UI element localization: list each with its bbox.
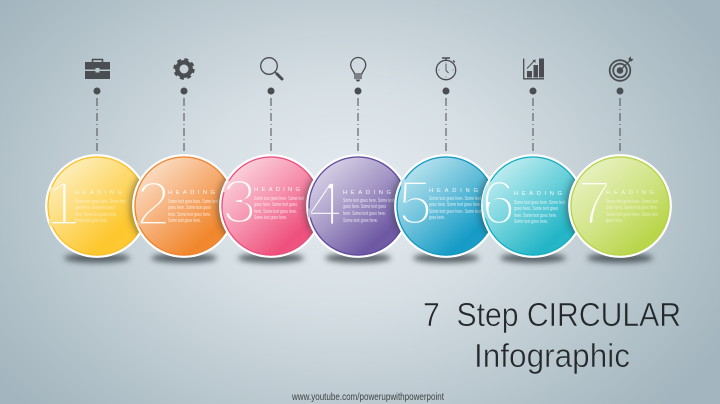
connector 5 — [442, 88, 450, 155]
connector 2 — [180, 88, 188, 155]
step 4 text: Some text goes here. Some text — [343, 198, 394, 204]
number 5: 5 — [398, 169, 432, 238]
website url: www.youtube.com/powerupwithpowerpoint — [291, 392, 444, 403]
floor shadows — [64, 253, 653, 263]
step 5 text: Some text goes here. Some text — [429, 196, 481, 202]
step 6 circle — [478, 154, 584, 258]
step 3 text: Some text goes here. — [254, 215, 287, 221]
step 2 text — [168, 190, 218, 224]
connector 4 — [354, 88, 362, 155]
step 3 text: goes here. Some text goes — [254, 202, 297, 208]
step 6 text: Some text goes here. Some text — [514, 200, 565, 206]
step 1 circle — [46, 155, 148, 257]
step 5 circle — [391, 154, 497, 258]
icon: stopwatch — [436, 58, 456, 80]
step 2 text: goes here. Some text goes — [168, 205, 211, 211]
step 3 text: Some text goes here. Some text — [254, 196, 304, 202]
step 7 text: goes here. Some text goes here. — [606, 205, 658, 211]
title — [423, 296, 681, 374]
step 7 text: Some text goes here. Some text — [606, 199, 658, 205]
step 7 text: HEADING — [606, 190, 654, 196]
step 4 circle — [303, 154, 409, 258]
step 4 text — [343, 190, 394, 224]
step 6 text — [514, 191, 565, 225]
step 4 text: here. Some text goes here. — [343, 211, 386, 217]
connector 6 — [530, 88, 536, 155]
step 4 text: goes here. Some text goes — [343, 204, 386, 210]
step 6 text: Some text goes here. — [514, 219, 548, 225]
connector 7 — [616, 88, 624, 155]
number 4: 4 — [308, 170, 342, 239]
step 6 text: goes here. Some text goes — [514, 206, 558, 212]
step 5 text: Some text goes here. Some text — [429, 209, 481, 215]
number 2: 2 — [136, 170, 170, 239]
title: 7 Step CIRCULAR — [423, 296, 681, 333]
step 7 text: goes here. — [606, 218, 623, 224]
step 6 text: here. Some text goes here. — [514, 213, 557, 219]
step 3 text: HEADING — [254, 187, 300, 193]
step 2 text: here. Some text goes here. — [168, 212, 211, 218]
step 1 text: Some text goes here. — [75, 218, 108, 224]
icon: gear — [175, 60, 193, 78]
step 4 text: Some text goes here. — [343, 218, 378, 224]
step 5 text: HEADING — [429, 188, 478, 194]
step 3 circle — [216, 154, 322, 258]
step 2 text: Some text goes here. Some text — [168, 199, 218, 205]
step 2 circle — [129, 154, 235, 258]
step 1 text: Some text goes here. Some text — [75, 199, 126, 205]
step 6 text: HEADING — [514, 191, 562, 197]
connector 1 — [94, 88, 100, 155]
step 1 text — [75, 190, 126, 224]
step 5 text: goes here. Some text goes here. — [429, 202, 481, 208]
icon: light bulb — [351, 58, 366, 82]
step 1 text: HEADING — [75, 190, 122, 196]
step 1 text: goes here. Some text goes — [75, 205, 115, 211]
step 4 text: HEADING — [343, 190, 391, 196]
icon: bar chart — [524, 58, 544, 79]
step 2 text: HEADING — [168, 190, 215, 196]
icon: briefcase — [85, 60, 110, 79]
number 6: 6 — [481, 169, 515, 238]
step 2 text: Some text goes here. — [168, 218, 201, 224]
step 3 text — [254, 187, 304, 221]
step 7 circle — [565, 154, 671, 258]
step 5 text — [429, 188, 481, 221]
number 7: 7 — [577, 169, 611, 238]
step 1 text: here. Some text goes here. — [75, 212, 117, 218]
step 7 text — [606, 190, 658, 224]
title: Infographic — [474, 337, 630, 374]
step 7 text: Some text goes here. Some text — [606, 212, 658, 218]
step 5 text: goes here. — [429, 215, 445, 221]
connector 3 — [268, 88, 274, 155]
icon: target — [610, 56, 634, 81]
icon: magnifier — [261, 58, 282, 79]
number 3: 3 — [222, 168, 256, 237]
step 3 text: here. Some text goes here. — [254, 209, 297, 215]
number 1: 1 — [46, 170, 80, 239]
